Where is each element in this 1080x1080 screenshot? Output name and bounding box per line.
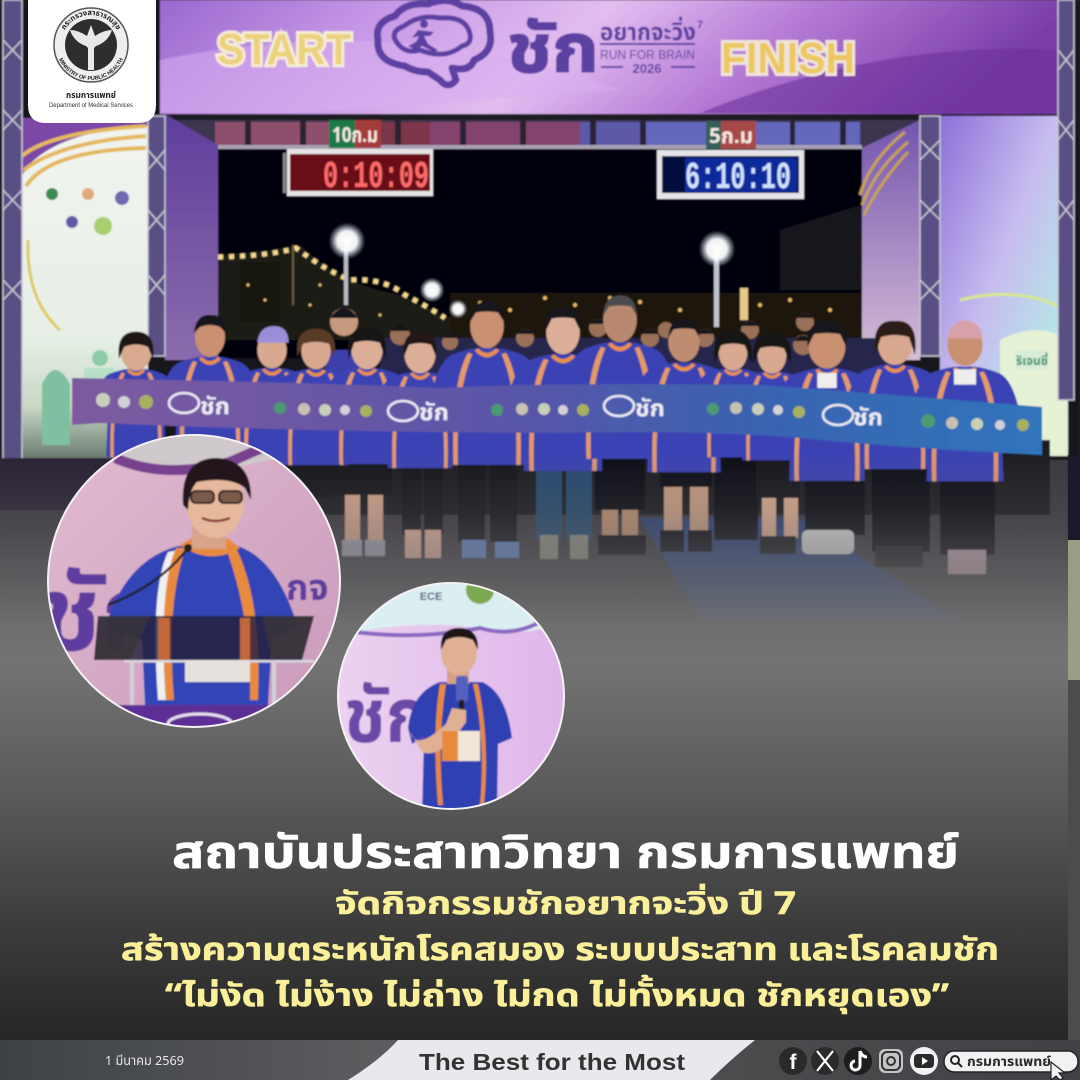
top banner: 2026 bbox=[633, 61, 661, 76]
icon: brain with runner bbox=[377, 0, 491, 85]
right side panel: ริเจนซี่ bbox=[1015, 352, 1048, 371]
icon: X bbox=[811, 1047, 839, 1075]
icon: runner figure bbox=[408, 20, 438, 52]
icon: YouTube bbox=[910, 1047, 938, 1075]
top banner bbox=[160, 0, 1058, 114]
ribbon brain icons bbox=[169, 393, 853, 425]
START label: START bbox=[217, 25, 351, 74]
crowd behind front row bbox=[325, 308, 900, 388]
subheading: event name: จัดกิจกรรมชักอยากจะวิ่ง ปี 7 bbox=[335, 881, 796, 928]
race clock: blue: 6:10:10 bbox=[685, 157, 791, 200]
icon: Instagram bbox=[879, 1049, 903, 1073]
photo circle: speaker with microphone: ECE bbox=[420, 591, 442, 603]
ribbon wordmarks bbox=[200, 391, 883, 436]
department name: กรมการแพทย์ bbox=[66, 89, 116, 103]
ministry seal bbox=[53, 7, 129, 83]
front row runners bbox=[92, 295, 1022, 481]
race clock: red: 0:10:09 bbox=[323, 156, 429, 199]
right side panel bbox=[940, 116, 1068, 456]
top banner: RUN FOR BRAIN bbox=[600, 47, 695, 62]
ministry seal: กระทรวงสาธารณสุข bbox=[62, 10, 120, 30]
icon: cursor bbox=[1051, 1062, 1065, 1080]
race clock: blue bbox=[657, 150, 804, 200]
search pill bbox=[944, 1051, 1078, 1080]
ribbon wordmarks: ชัก bbox=[419, 397, 449, 431]
logo card: Department of Medical Services: Department of Medical Services bbox=[49, 103, 133, 109]
photo circle: speaker with microphone: ชัก bbox=[344, 662, 429, 777]
distance sign: 5 km: 5ก.ม bbox=[709, 122, 753, 153]
ribbon wordmarks: ชัก bbox=[200, 391, 230, 425]
ribbon wordmarks: ชัก bbox=[853, 402, 883, 436]
truss ceiling bbox=[165, 114, 920, 149]
footer slogan plate bbox=[348, 1040, 755, 1080]
left side panel bbox=[20, 118, 148, 458]
top banner: 7 bbox=[697, 19, 703, 31]
top banner: อยากจะวิ่ง bbox=[600, 15, 696, 51]
FINISH label: FINISH bbox=[721, 34, 855, 83]
ribbon sponsor logos bbox=[96, 393, 1029, 431]
headline: สถาบันประสาทวิทยา กรมการแพทย์ bbox=[172, 821, 959, 889]
distance sign: 10 km: 10ก.ม bbox=[332, 121, 378, 152]
icon: facebook: f bbox=[790, 1051, 798, 1074]
runners' legs bbox=[235, 440, 995, 574]
subheading: slogan: “ไม่งัด ไม่ง้าง ไม่ถ่าง ไม่กด ไม่ทั้งหมด ชักหยุดเอง” bbox=[165, 973, 949, 1020]
right edge strip bbox=[1068, 455, 1080, 1040]
logo card: Department of Medical Services bbox=[28, 0, 156, 123]
race clock: red bbox=[283, 149, 433, 199]
photo circle: speaker with microphone bbox=[337, 582, 565, 810]
photo circle: speaker at podium: กจ bbox=[286, 563, 329, 617]
footer bar bbox=[0, 1040, 1080, 1080]
icon: facebook bbox=[779, 1047, 807, 1075]
truss pillars bbox=[3, 0, 1074, 460]
night background with string lights bbox=[218, 148, 862, 358]
event logo wordmark: ชัก bbox=[507, 0, 599, 103]
photo circle: speaker at podium: ชัก bbox=[38, 540, 166, 698]
search pill: กรมการแพทย์ bbox=[967, 1052, 1051, 1072]
footer date: 1 มีนาคม 2569 bbox=[105, 1051, 184, 1071]
grey gradient overlay bbox=[0, 450, 1068, 1040]
ministry seal: MINISTRY OF PUBLIC HEALTH bbox=[59, 58, 123, 80]
photo circle: speaker at podium bbox=[38, 430, 350, 735]
footer slogan: The Best for the Most bbox=[419, 1049, 685, 1075]
purple-to-blue ribbon banner bbox=[72, 378, 1042, 455]
subheading: awareness: สร้างความตระหนักโรคสมอง ระบบประสาท และโรคลมชัก bbox=[121, 927, 999, 974]
icon: TikTok bbox=[844, 1047, 872, 1075]
ground and lower background bbox=[0, 440, 1068, 660]
ribbon wordmarks: ชัก bbox=[635, 393, 665, 427]
inner purple wings bbox=[165, 114, 920, 360]
